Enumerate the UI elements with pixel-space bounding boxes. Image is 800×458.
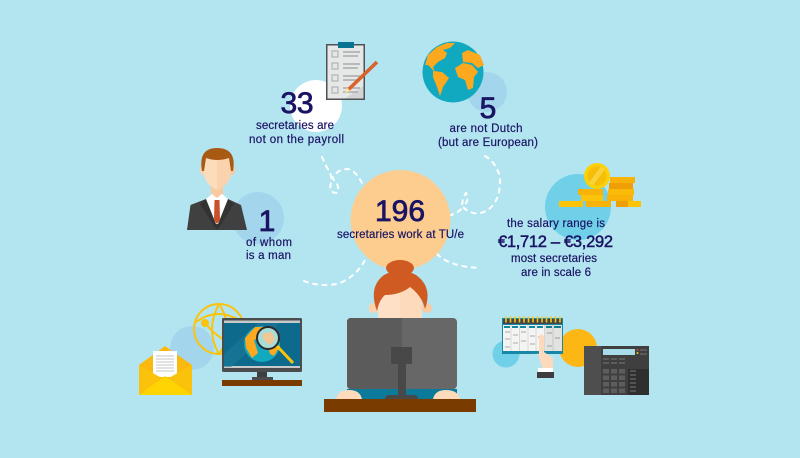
label: secretaries are not on the payroll: secretaries are [256, 120, 334, 132]
circle: blue [492, 340, 520, 368]
label: most secretaries are in scale 6 [511, 253, 597, 279]
illustration: calendar and phone [492, 316, 649, 395]
label: most secretaries are in scale 6: are in scale 6 [521, 267, 591, 279]
stat: salary range [498, 163, 641, 279]
desk [324, 399, 476, 412]
circle: blue behind coins [545, 174, 611, 240]
icon: pointing hand [533, 334, 554, 378]
worker head and hair [368, 260, 432, 320]
label: secretaries are not on the payroll [249, 120, 344, 146]
circle: blue [170, 326, 214, 370]
circle: orange [559, 329, 597, 367]
number: 196: 196 [375, 195, 425, 228]
number: salary range: €1,712 – €3,292 [498, 233, 613, 251]
dashed connector: payroll to centre [322, 157, 363, 193]
icon: pencil [348, 62, 377, 90]
icon: coins [559, 163, 641, 207]
label: of whom is a man: is a man [246, 250, 291, 262]
label: of whom is a man: of whom [246, 237, 292, 249]
label: are not Dutch (but are European) [438, 123, 538, 149]
icon: clipboard [326, 42, 377, 100]
icon: monitor [222, 318, 302, 386]
worker body [347, 389, 457, 399]
dashed connector: man to worker [304, 258, 366, 285]
icon: wire globe [194, 304, 244, 354]
label: secretaries work at TU/e: secretaries work at TU/e [337, 229, 464, 241]
worker hands [336, 390, 460, 399]
stat: 33 not on payroll [249, 42, 377, 146]
circle: white [290, 80, 342, 132]
icon: globe [422, 42, 484, 102]
label: are not Dutch (but are European): (but are European) [438, 137, 538, 149]
dashed connector: salary to worker [437, 254, 481, 268]
number: 5: 5 [480, 92, 496, 125]
icon: calendar [502, 316, 563, 354]
label: most secretaries are in scale 6: most secretaries [511, 253, 597, 265]
dashed connector: Dutch to centre [451, 156, 500, 215]
number: 33: 33 [280, 87, 314, 120]
stat: 5 not Dutch [422, 42, 538, 149]
label: secretaries are not on the payroll: not on the payroll [249, 134, 344, 146]
label: the salary range is: the salary range is [507, 218, 605, 230]
illustration: worker at desk [324, 260, 476, 412]
circle: centre peach [350, 170, 450, 270]
icon: man [187, 148, 247, 230]
illustration: email and web [139, 304, 302, 395]
icon: envelope [139, 346, 192, 395]
number: 1: 1 [259, 205, 275, 238]
circle: blue behind globe [467, 72, 507, 112]
label: are not Dutch (but are European): are not Dutch [450, 123, 522, 135]
stat: 1 man [187, 148, 292, 262]
icon: desk phone [584, 346, 649, 395]
monitor back [347, 318, 457, 399]
label: of whom is a man [246, 237, 292, 262]
stat: 196 secretaries [337, 170, 464, 270]
circle: blue behind man [232, 192, 284, 244]
